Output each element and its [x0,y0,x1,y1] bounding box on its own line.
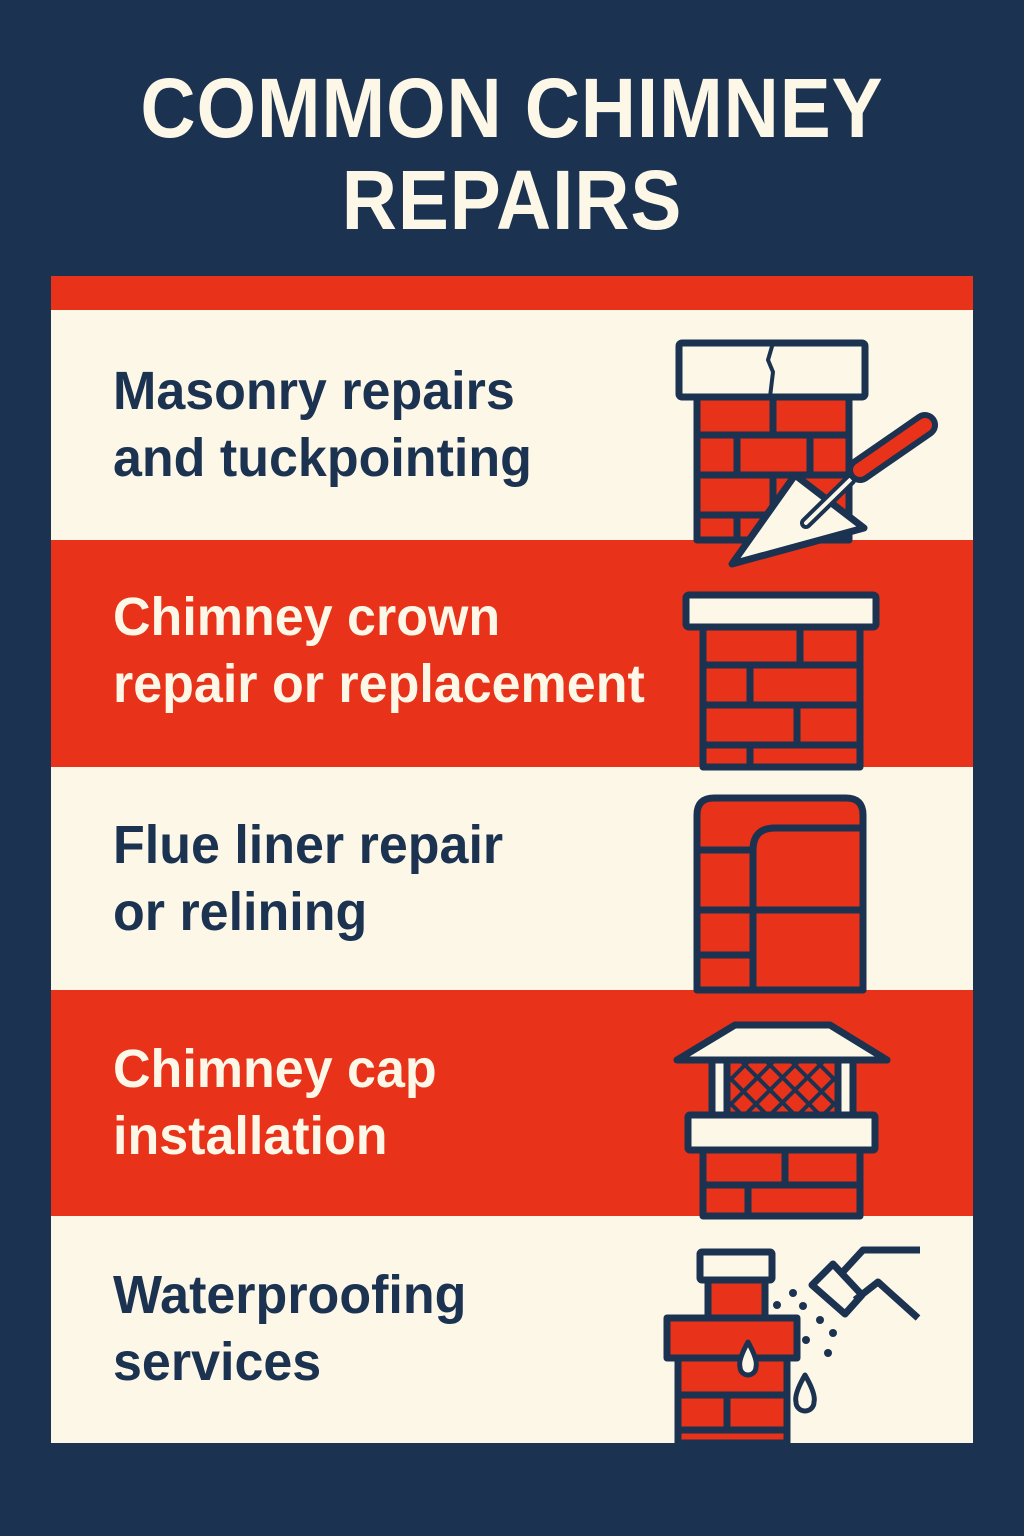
text: crown: repair or replacement [113,654,645,714]
text: flue: or relining [113,882,367,942]
title: COMMON CHIMNEY [140,61,884,155]
text: masonry [113,361,532,488]
panel: cap [51,990,973,1216]
icon: waterproofing [667,1250,920,1443]
text: masonry: Masonry repairs [113,361,515,421]
text: waterproofing: services [113,1332,321,1392]
text: flue [113,815,503,942]
icon: chimney crown [686,595,876,767]
text: cap: Chimney cap [113,1039,437,1099]
panel: top strip [51,276,973,310]
text: waterproofing [113,1265,466,1392]
title: REPAIRS [342,153,682,247]
panel: flue [51,767,973,990]
icon: flue liner [697,798,863,990]
text: crown [113,587,645,714]
panel: waterproofing [51,1216,973,1443]
text: flue: Flue liner repair [113,815,503,875]
icon: masonry chimney with trowel [679,343,925,564]
text: cap: installation [113,1106,387,1166]
panel: crown [51,540,973,767]
text: crown: Chimney crown [113,587,500,647]
panel: masonry [51,310,973,540]
text: cap [113,1039,437,1166]
text: waterproofing: Waterproofing [113,1265,466,1325]
title [140,61,884,247]
text: masonry: and tuckpointing [113,428,532,488]
icon: chimney cap [677,1025,887,1216]
